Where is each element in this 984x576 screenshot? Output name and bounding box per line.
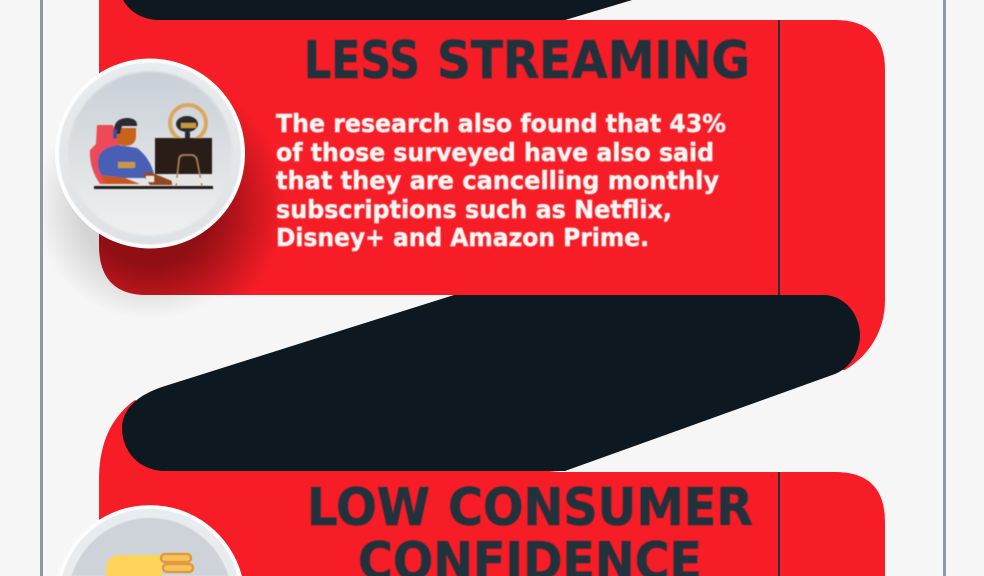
icon badge: coins and wallet: [58, 505, 242, 576]
heading: low consumer confidence: CONSUMER: [448, 478, 753, 538]
dark band: top: [123, 0, 632, 20]
icon badge: person at computer: [55, 58, 245, 248]
body text: that they are cancelling monthly: [276, 166, 719, 195]
icon: chair: [90, 125, 120, 184]
icon artwork: [90, 105, 213, 189]
icon: ring light and webcam: [170, 105, 206, 141]
icon: wallet: [106, 555, 162, 576]
heading: less streaming: LESS: [304, 31, 420, 91]
badge shadow on page: [44, 90, 264, 320]
panel: less streaming: [99, 0, 885, 370]
body text: [276, 109, 726, 252]
icon: coins: [161, 554, 193, 572]
vertical divider: [778, 472, 780, 576]
heading: low consumer confidence: [307, 478, 753, 576]
icon: monitor: [155, 138, 212, 186]
icon: person: [98, 118, 172, 185]
heading: less streaming: STREAMING: [437, 31, 750, 91]
vertical divider: [778, 20, 780, 296]
heading: less streaming: [304, 31, 750, 91]
heading: low consumer confidence: LOW: [307, 478, 430, 538]
panel: low consumer confidence: [99, 400, 885, 576]
body text: subscriptions such as Netflix,: [276, 195, 672, 224]
icon: desk: [94, 186, 213, 189]
body text: The research also found that 43%: [276, 109, 726, 138]
body text: of those surveyed have also said: [276, 138, 714, 167]
dark band: middle: [122, 295, 860, 471]
body text: Disney+ and Amazon Prime.: [276, 223, 649, 252]
